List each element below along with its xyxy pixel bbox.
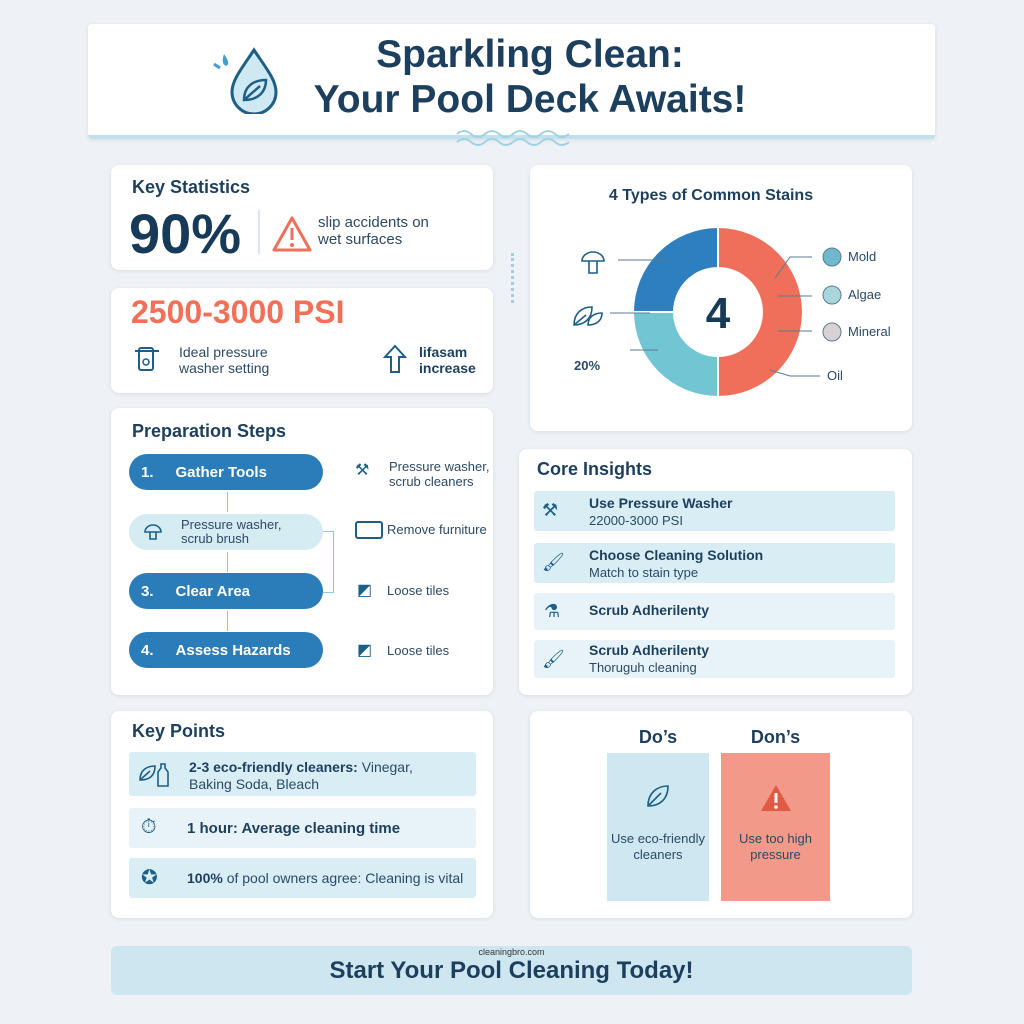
insight 3: Scrub Adherilenty — [589, 602, 709, 618]
insight 4: Thoruguh cleaning — [589, 660, 697, 675]
point 2: 1 hour: Average cleaning time — [187, 820, 400, 837]
panel: stains chart: 4 Types of Common Stains — [609, 187, 813, 204]
insight 2: Choose Cleaning Solution — [589, 547, 763, 563]
dont box: Use too high pressure — [739, 831, 812, 862]
insight 2 — [534, 543, 895, 583]
footer banner: Start Your Pool Cleaning Today! — [329, 957, 694, 984]
step 2: scrub brush — [181, 531, 249, 546]
step 2 — [129, 514, 323, 550]
panel: PSI: increase — [419, 360, 476, 376]
donut chart: Algae — [848, 287, 881, 302]
panel: preparation steps: ◩ — [357, 582, 372, 599]
step 3: Clear Area — [176, 582, 250, 600]
point 2 — [129, 808, 476, 848]
step 3: 3. — [141, 582, 154, 600]
insight 1 — [534, 491, 895, 531]
icon: washer — [135, 347, 159, 371]
panel: dos and donts: Don’s — [751, 727, 800, 747]
insight 1: Use Pressure Washer — [589, 495, 732, 511]
panel: PSI: washer setting — [179, 360, 269, 376]
panel: preparation steps: Pressure washer, — [389, 459, 489, 474]
panel: dos and donts — [530, 711, 912, 918]
point 3: ✪ — [141, 867, 158, 889]
point 1: Baking Soda, Bleach — [189, 776, 319, 792]
step 1 — [129, 454, 323, 490]
footer banner — [111, 946, 912, 995]
panel: preparation steps — [111, 408, 493, 695]
step 1: 1. — [141, 464, 154, 480]
insight 3 — [534, 593, 895, 630]
insight 3: ⚗ — [544, 601, 560, 621]
icon: water drop — [213, 47, 278, 114]
panel: core insights — [519, 449, 912, 695]
step 3 — [129, 573, 323, 609]
step 2: Pressure washer, — [181, 517, 281, 532]
dont box — [721, 753, 830, 901]
panel: stains chart — [530, 165, 912, 431]
panel: key statistics: Key Statistics — [132, 177, 250, 197]
panel: preparation steps: Loose tiles — [387, 583, 449, 598]
header card — [88, 24, 935, 139]
dotted connector — [511, 253, 514, 303]
panel: preparation steps: ◩ — [357, 642, 372, 659]
panel: preparation steps: Loose tiles — [387, 643, 449, 658]
point 1 — [129, 752, 476, 796]
donut chart: 20% — [574, 358, 600, 373]
panel: PSI — [111, 288, 493, 393]
stat 90%: 90% — [129, 202, 241, 265]
panel: dos and donts: Do’s — [639, 727, 677, 747]
donut chart: Mineral — [848, 324, 891, 339]
point 3 — [129, 858, 476, 898]
point 2: ⏱ — [141, 816, 157, 838]
title: Sparkling Clean: — [376, 33, 684, 76]
donut chart: Oil — [827, 368, 843, 383]
donut chart — [573, 228, 891, 396]
panel: PSI: Ideal pressure — [179, 344, 268, 360]
donut chart: 4 — [706, 289, 731, 338]
panel: PSI: 2500-3000 PSI — [131, 294, 344, 330]
insight 2: Match to stain type — [589, 565, 698, 580]
point 1: 2-3 eco-friendly cleaners: Vinegar, — [189, 759, 413, 775]
panel: core insights: Core Insights — [537, 459, 652, 479]
title — [314, 33, 746, 121]
insight 4: 🖌 — [542, 649, 565, 669]
step 4 — [129, 632, 323, 668]
panel: key statistics: wet surfaces — [318, 231, 402, 248]
panel: preparation steps: ⚒ — [355, 462, 369, 479]
do box — [607, 753, 709, 901]
panel: key points: Key Points — [132, 721, 225, 741]
step 4: Assess Hazards — [176, 642, 291, 658]
footer banner: cleaningbro.com — [478, 947, 545, 957]
insight 1: 22000-3000 PSI — [589, 513, 683, 528]
insight 4 — [534, 640, 895, 678]
panel: key statistics: slip accidents on — [318, 214, 429, 231]
panel: PSI: lifasam — [419, 344, 467, 360]
panel: preparation steps: Remove furniture — [387, 522, 487, 537]
do box: Use eco-friendly cleaners — [611, 831, 705, 862]
icon: warning — [272, 216, 312, 252]
step 4: 4. — [141, 642, 154, 658]
step 1: Gather Tools — [176, 464, 267, 480]
panel: key statistics — [111, 165, 493, 270]
panel: key points — [111, 711, 493, 918]
insight 4: Scrub Adherilenty — [589, 642, 709, 658]
panel: preparation steps: scrub cleaners — [389, 474, 474, 489]
icon: up arrow — [383, 344, 407, 373]
point 3: 100% of pool owners agree: Cleaning is vital — [187, 870, 463, 886]
donut chart: Mold — [848, 249, 876, 264]
insight 1: ⚒ — [542, 500, 558, 520]
title: Your Pool Deck Awaits! — [314, 78, 746, 121]
panel: preparation steps: Preparation Steps — [132, 421, 286, 441]
insight 2: 🖌 — [542, 552, 565, 572]
wave ornament — [456, 130, 570, 146]
